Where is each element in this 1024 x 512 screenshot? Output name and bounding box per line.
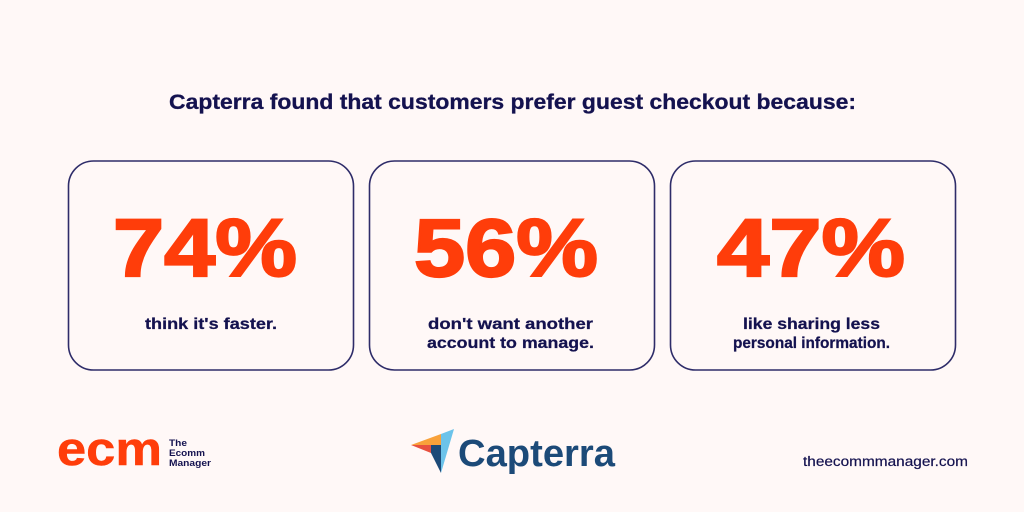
label: another account: account to manage. xyxy=(427,335,594,352)
panel: 74 percent xyxy=(68,161,354,370)
label: less personal information xyxy=(733,316,890,352)
stat: 47%: 47% xyxy=(717,203,905,294)
title: Capterra found that customers prefer guest checkout because: xyxy=(169,91,856,114)
logo: ecm: ecm xyxy=(57,422,162,475)
website url: theecommmanager.com xyxy=(803,454,968,469)
logo: Capterra xyxy=(411,429,616,475)
label: less personal information: personal information. xyxy=(733,335,890,352)
logo: ecm: The xyxy=(169,438,187,449)
logo: ecm xyxy=(57,422,211,475)
logo: ecm: Manager xyxy=(169,458,211,469)
label: think it's faster: think it's faster. xyxy=(145,316,277,333)
label: less personal information: like sharing less xyxy=(743,316,880,333)
panel: 56 percent xyxy=(370,161,654,370)
stat: 74%: 74% xyxy=(113,203,297,294)
label: another account: don't want another xyxy=(428,316,593,333)
logo: Capterra: Capterra xyxy=(458,433,616,475)
panel: 47 percent xyxy=(670,161,956,370)
logo: ecm: Ecomm xyxy=(169,448,205,459)
label: another account xyxy=(427,316,594,352)
icon: Capterra arrow xyxy=(411,429,454,473)
stat: 56%: 56% xyxy=(414,203,598,294)
